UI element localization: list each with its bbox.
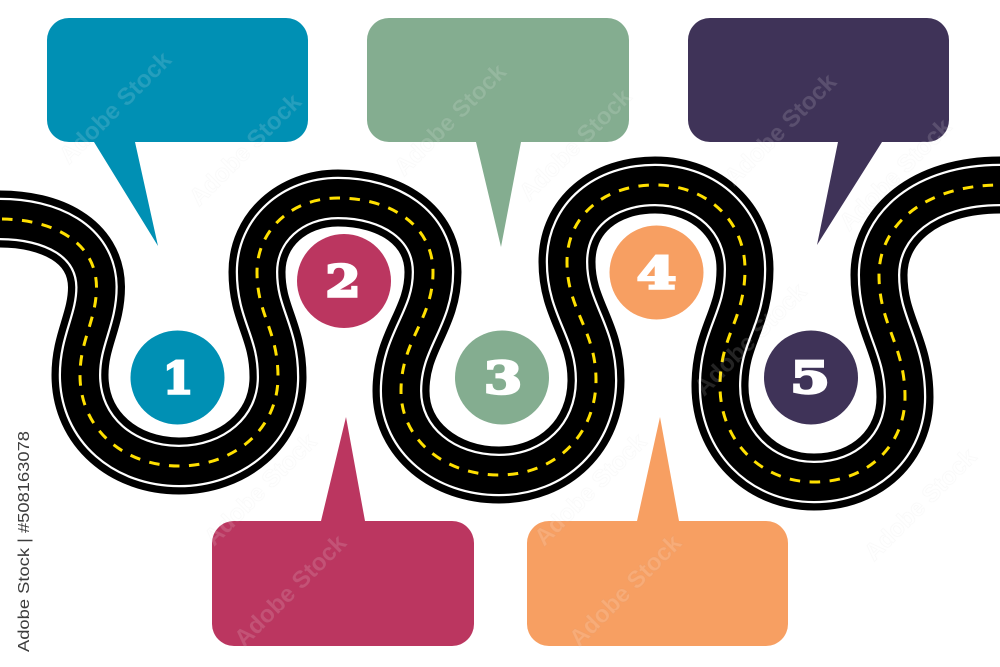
winding road [0,185,1000,482]
step 4 marker: 4 [637,248,676,300]
stock watermark pattern: Adobe Stock [184,88,307,211]
step 3 marker [455,330,549,424]
step 2 marker: 2 [325,256,361,308]
callout 1: blue speech bubble [47,18,308,246]
callout 5: purple speech bubble [688,18,949,245]
callout 3: green speech bubble [367,18,629,247]
step 3 marker: 3 [484,352,522,404]
stock watermark pattern: Adobe Stock [564,529,687,652]
stock watermark pattern: Adobe Stock [514,83,637,206]
stock watermark pattern: Adobe Stock [689,278,812,401]
step 4 marker [610,226,704,320]
stock watermark pattern: Adobe Stock [54,46,177,169]
step 1 marker [130,330,224,424]
vertical stock id text: Adobe Stock | #508163078 [16,431,33,652]
stock watermark pattern: Adobe Stock [834,113,957,236]
stock watermark pattern: Adobe Stock [389,58,512,181]
callout 2: crimson speech bubble [212,417,474,646]
stock watermark pattern: Adobe Stock [719,68,842,191]
step 1 marker: 1 [163,354,193,405]
stock watermark pattern: Adobe Stock [859,443,982,566]
step 2 marker [297,234,391,328]
stock watermark pattern: Adobe Stock [529,428,652,551]
step 5 marker [764,330,858,424]
callout 4: orange speech bubble [527,417,788,646]
stock watermark pattern: Adobe Stock [199,428,322,551]
step 5 marker: 5 [790,352,830,404]
stock watermark pattern: Adobe Stock [229,529,352,652]
